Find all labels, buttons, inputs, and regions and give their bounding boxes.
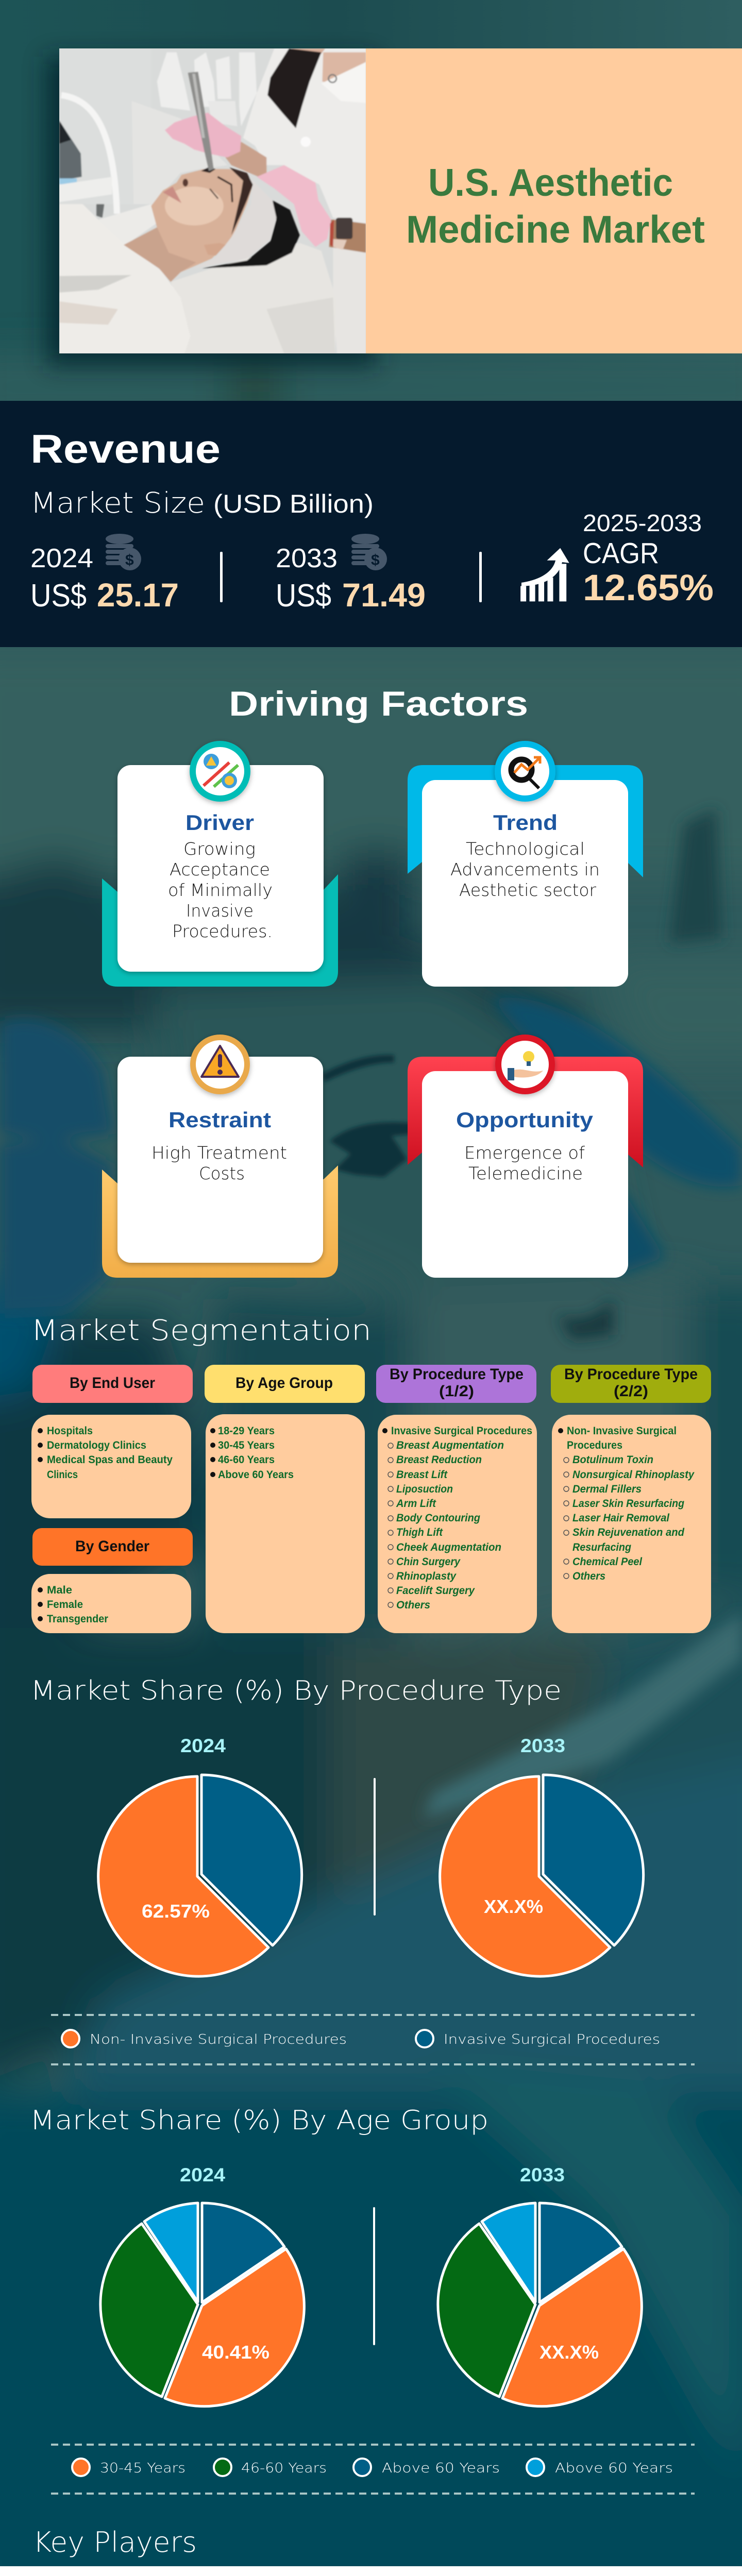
procedure type 2 list: Dermal Fillers [572, 1483, 642, 1495]
wall and equipment [59, 120, 104, 205]
procedure type 2 header: (2/2) [614, 1383, 648, 1400]
procedure type 1 list: Cheek Augmentation [396, 1541, 501, 1553]
gender header: By Gender [75, 1538, 149, 1555]
trend title: Trend [493, 810, 558, 835]
procedure type 2 header: By Procedure Type [564, 1366, 698, 1383]
revenue heading: Revenue [30, 426, 221, 471]
CAGR: CAGR [583, 537, 659, 570]
2033 revenue [276, 544, 426, 614]
procedure type 1 list: Body Contouring [396, 1512, 480, 1524]
icon: coins 2033 [351, 534, 387, 570]
title: U.S. Aesthetic [428, 161, 673, 204]
treatment photo [59, 48, 366, 353]
driver description: Acceptance [170, 859, 270, 879]
market size label [30, 486, 374, 519]
age group list: Above 60 Years [218, 1469, 294, 1481]
icon: restraint [190, 1035, 250, 1094]
procedure type 2 list: Laser Skin Resurfacing [572, 1498, 684, 1510]
end user header: By End User [70, 1375, 155, 1392]
pie chart: procedure type 2033: XX.X% [484, 1896, 543, 1917]
market share by procedure type heading: Market Share (%) By Procedure Type [30, 1675, 562, 1706]
card: opportunity [408, 1035, 643, 1278]
age group list [206, 1414, 365, 1633]
icon: driver [190, 741, 250, 802]
2024 revenue: 25.17 [97, 577, 179, 614]
opportunity description: Emergence of [464, 1143, 585, 1163]
title panel [366, 48, 742, 353]
key players panel [0, 2566, 742, 2576]
driving factors heading: Driving Factors [229, 684, 528, 723]
procedure type 2 header [551, 1365, 711, 1403]
pie chart: procedure type 2024: 62.57% [142, 1901, 210, 1922]
procedure type 1 list: Invasive Surgical Procedures [391, 1425, 532, 1437]
procedure type 1 list: Thigh Lift [396, 1527, 443, 1538]
age group header [205, 1365, 365, 1403]
opportunity description [464, 1143, 585, 1183]
driver description: Invasive [186, 901, 254, 921]
market segmentation heading: Market Segmentation [31, 1314, 372, 1347]
segment column: age group [205, 1365, 365, 1633]
CAGR: 2025-2033 [583, 510, 702, 536]
2033 revenue: 2033 [276, 544, 338, 573]
procedure type 1 list: Chin Surgery [396, 1556, 461, 1568]
trend description [450, 839, 600, 900]
procedure type 1 list: Liposuction [396, 1483, 453, 1495]
pie chart: age group 2024: 2024 [180, 2164, 225, 2185]
end user list: Hospitals [47, 1425, 93, 1437]
opportunity description: Telemedicine [468, 1163, 583, 1183]
pie chart: procedure type 2024: 2024 [180, 1735, 226, 1756]
icon: trend [495, 741, 555, 802]
procedure type 2 list: Skin Rejuvenation and [572, 1527, 685, 1538]
end user list: Dermatology Clinics [47, 1439, 146, 1451]
legend: age group: 30-45 Years [100, 2461, 185, 2476]
age group list: 46-60 Years [218, 1454, 275, 1466]
end user header [32, 1365, 193, 1403]
segment column: procedure type 2 [551, 1365, 711, 1633]
icon: growth arrow [520, 548, 569, 601]
procedure type 2 list: Botulinum Toxin [572, 1454, 653, 1466]
end user list: Clinics [47, 1469, 78, 1481]
procedure type 1 header: By Procedure Type [390, 1366, 524, 1383]
gender list: Transgender [47, 1613, 108, 1625]
pie chart: age group 2033 [438, 2164, 642, 2406]
pie chart: age group 2033: XX.X% [539, 2342, 599, 2363]
procedure type 2 list: Nonsurgical Rhinoplasty [572, 1469, 695, 1481]
procedure type 1 list: Arm Lift [396, 1498, 436, 1510]
sheets [98, 204, 159, 245]
trend description: Technological [466, 839, 585, 859]
pie chart: age group 2024: 40.41% [202, 2342, 269, 2363]
end user list: Medical Spas and Beauty [47, 1454, 173, 1466]
market size label: (USD Billion) [213, 489, 374, 518]
end user list [31, 1415, 191, 1518]
age group list: 18-29 Years [218, 1425, 275, 1437]
key players heading: Key Players [33, 2526, 197, 2558]
restraint description: Costs [199, 1163, 245, 1183]
gender list: Female [47, 1599, 83, 1611]
card: restraint [102, 1035, 338, 1278]
procedure type 1 list: Others [396, 1599, 430, 1611]
driver title: Driver [185, 810, 254, 835]
procedure type 2 list: Procedures [567, 1439, 622, 1451]
2033 revenue: 71.49 [342, 577, 426, 614]
legend: procedure type: Non- Invasive Surgical Procedures [90, 2032, 347, 2047]
patient [150, 168, 252, 272]
legend: age group [72, 2459, 673, 2476]
gender header [32, 1528, 193, 1566]
icon: coins 2033: $ [371, 552, 380, 569]
legend: age group: 46-60 Years [241, 2461, 327, 2476]
trend description: Aesthetic sector [459, 880, 596, 900]
2024 revenue: 2024 [30, 544, 93, 573]
driver description: of Minimally [168, 880, 273, 900]
nurse [243, 48, 366, 224]
gender list: Male [47, 1584, 72, 1596]
gloves and pen [165, 113, 241, 157]
market size label: Market Size [30, 486, 205, 519]
trend description: Advancements in [450, 859, 600, 879]
restraint title: Restraint [168, 1108, 271, 1132]
segment column: end user and gender [31, 1365, 193, 1633]
procedure type 1 list [378, 1415, 537, 1633]
segment column: procedure type 1 [376, 1365, 537, 1633]
restraint description [151, 1143, 287, 1183]
procedure type 1 list: Rhinoplasty [396, 1570, 457, 1582]
legend: age group: Above 60 Years [555, 2461, 673, 2476]
age group header: By Age Group [235, 1375, 333, 1392]
icon: opportunity [495, 1035, 555, 1094]
procedure type 1 header [376, 1365, 536, 1403]
procedure type 1 header: (1/2) [439, 1383, 474, 1400]
procedure type 2 list: Chemical Peel [572, 1556, 643, 1568]
icon: coins 2024 [106, 534, 141, 570]
legend: procedure type: Invasive Surgical Procedures [444, 2032, 660, 2047]
procedure type 2 list [552, 1415, 711, 1633]
procedure type 2 list: Others [572, 1570, 605, 1582]
revenue panel [0, 401, 742, 647]
icon: coins 2024: $ [125, 552, 134, 569]
procedure type 2 list: Non- Invasive Surgical [567, 1425, 677, 1437]
title: Medicine Market [406, 208, 705, 251]
driver description: Procedures. [172, 921, 273, 941]
procedure type 2 list: Resurfacing [572, 1541, 631, 1553]
pie chart: procedure type 2024 [98, 1735, 302, 1976]
card: driver [102, 741, 338, 987]
age group list: 30-45 Years [218, 1439, 275, 1451]
2024 revenue: US$ [30, 578, 87, 614]
pie chart: age group 2033: 2033 [520, 2164, 565, 2185]
CAGR [583, 510, 714, 608]
legend: age group: Above 60 Years [382, 2461, 500, 2476]
market share by age group heading: Market Share (%) By Age Group [30, 2105, 488, 2136]
header: photo and title panel [46, 48, 742, 366]
title [406, 161, 705, 251]
gender list [31, 1574, 191, 1633]
2024 revenue [30, 544, 179, 614]
pie chart: age group 2024 [100, 2164, 304, 2406]
restraint description: High Treatment [151, 1143, 287, 1163]
driver description [168, 839, 273, 941]
procedure type 1 list: Facelift Surgery [396, 1585, 475, 1597]
procedure type 1 list: Breast Lift [396, 1469, 448, 1481]
pie chart: procedure type 2033 [440, 1735, 644, 1976]
driver description: Growing [183, 839, 256, 859]
opportunity title: Opportunity [456, 1108, 594, 1132]
card: trend [408, 741, 643, 987]
CAGR: 12.65% [583, 568, 714, 608]
procedure type 1 list: Breast Augmentation [396, 1439, 504, 1451]
legend: procedure type [62, 2030, 660, 2047]
procedure type 2 list: Laser Hair Removal [572, 1512, 670, 1524]
2033 revenue: US$ [276, 578, 331, 614]
procedure type 1 list: Breast Reduction [396, 1454, 482, 1466]
pie chart: procedure type 2033: 2033 [520, 1735, 565, 1756]
